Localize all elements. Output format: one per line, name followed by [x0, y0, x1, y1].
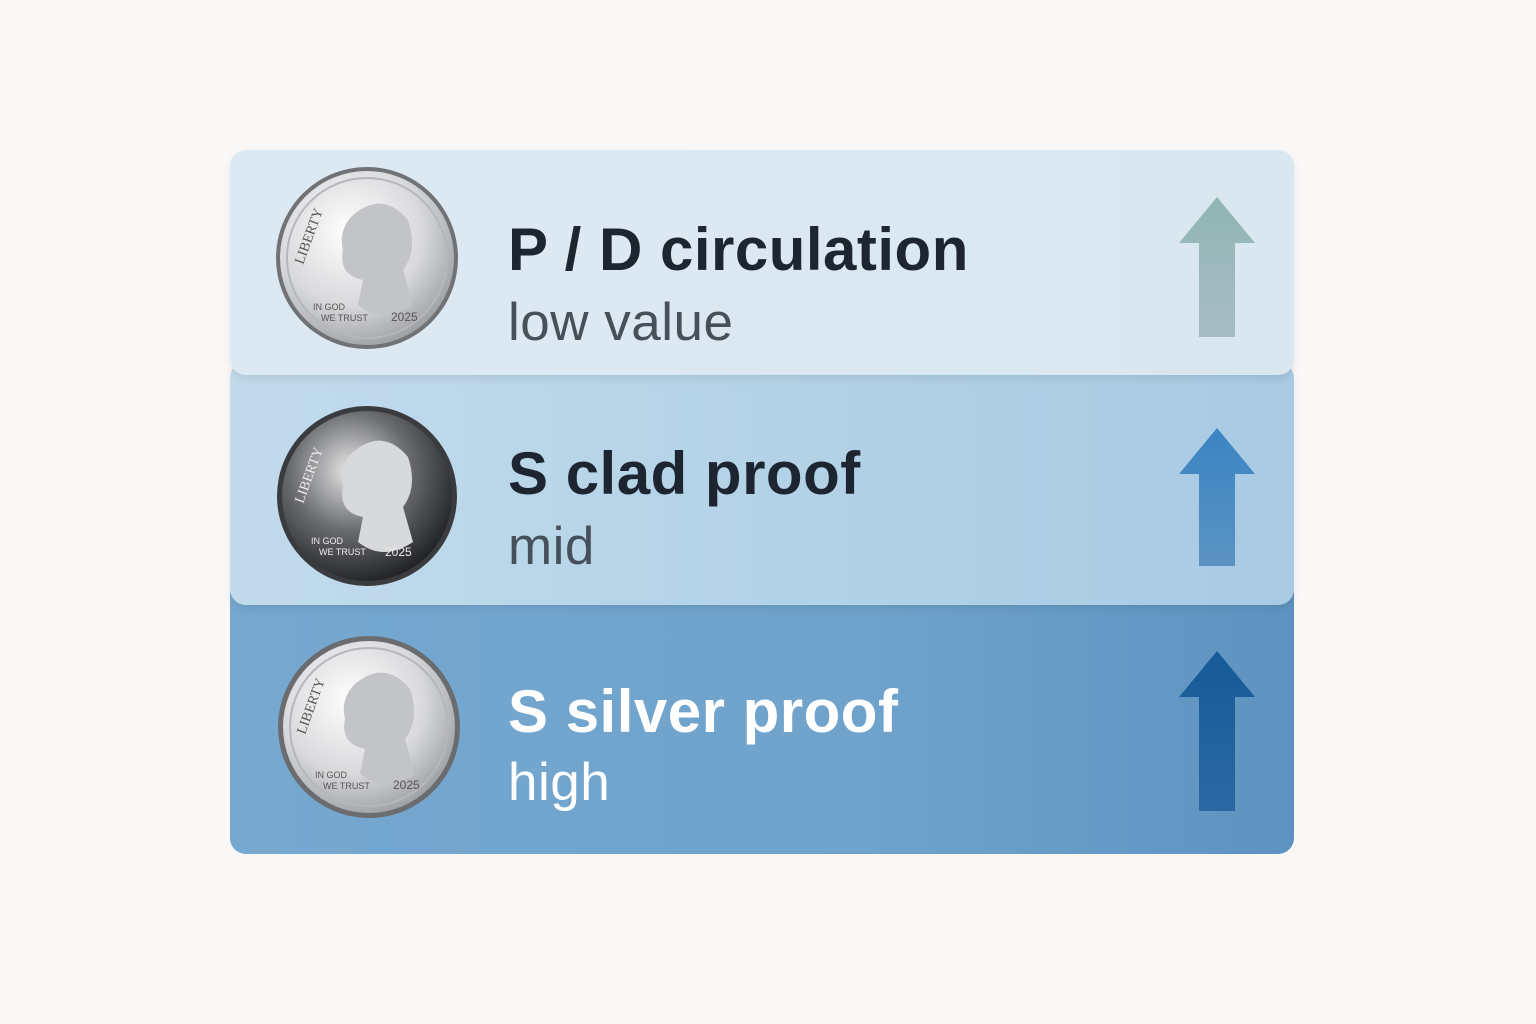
coin: silver proof dime: IN GOD	[315, 770, 348, 780]
coin: clad proof dime: LIBERTY	[293, 445, 327, 505]
text: low value: low value	[508, 293, 733, 352]
heading: S silver proof: S silver proof	[508, 678, 898, 745]
heading: S clad proof: S clad proof	[508, 440, 861, 507]
text: high: high	[508, 753, 610, 812]
panel: row 3 silver proof	[230, 590, 1294, 854]
coin: circulation dime: LIBERTY	[293, 206, 327, 266]
panel: row 1 circulation	[230, 150, 1294, 375]
coin: circulation dime: IN GOD	[313, 302, 346, 312]
coin: clad proof dime: IN GOD	[311, 536, 344, 546]
coin: clad proof dime	[277, 406, 457, 586]
text: mid: mid	[508, 517, 595, 576]
coin: circulation dime	[276, 167, 458, 349]
heading: P / D circulation: P / D circulation	[508, 216, 969, 283]
coin: silver proof dime: WE TRUST	[323, 781, 370, 791]
arrow: row 1	[1179, 197, 1255, 337]
arrow: row 3	[1179, 651, 1255, 811]
coin: clad proof dime: 2025	[385, 545, 412, 559]
coin: clad proof dime: WE TRUST	[319, 547, 366, 557]
coin: silver proof dime: LIBERTY	[295, 676, 329, 736]
arrow: row 2	[1179, 428, 1255, 566]
coin: circulation dime: 2025	[391, 310, 418, 324]
coin: circulation dime: WE TRUST	[321, 313, 368, 323]
coin: silver proof dime	[278, 636, 460, 818]
panel: row 2 clad proof	[230, 362, 1294, 605]
coin: silver proof dime: 2025	[393, 778, 420, 792]
